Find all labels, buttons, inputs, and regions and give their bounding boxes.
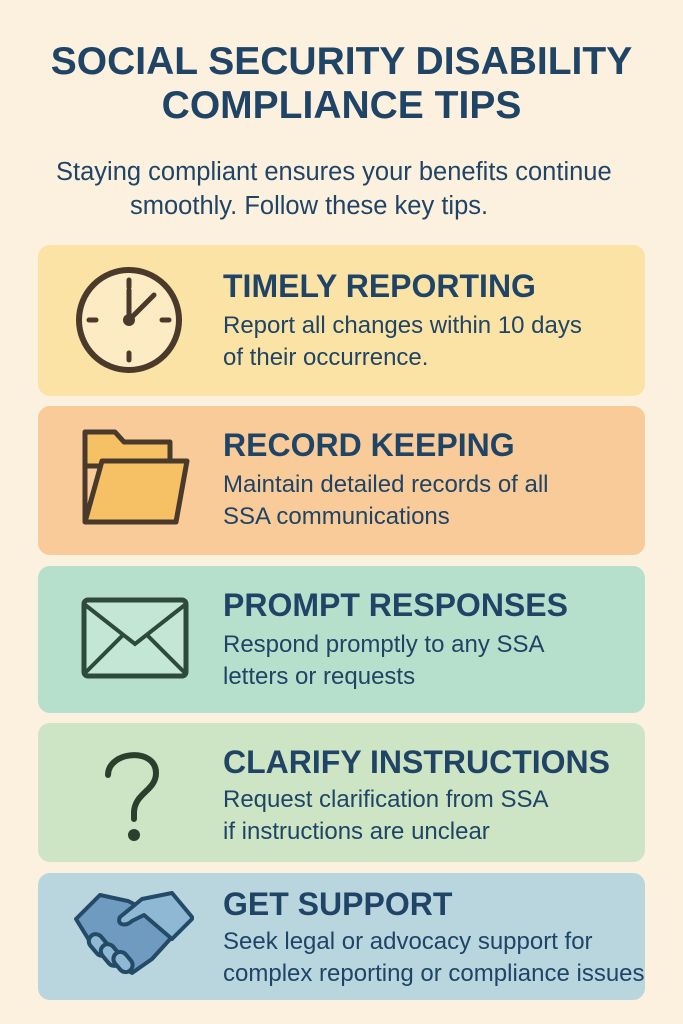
subtitle: Staying compliant ensures your benefits continue bbox=[56, 158, 612, 186]
panel: prompt responses bbox=[38, 566, 645, 713]
icon: folder bbox=[82, 430, 190, 524]
heading: RECORD KEEPING bbox=[223, 427, 515, 463]
text: if instructions are unclear bbox=[223, 818, 490, 845]
subtitle bbox=[56, 158, 612, 220]
text: Request clarification from SSA bbox=[223, 786, 548, 813]
text bbox=[223, 312, 582, 371]
text: Respond promptly to any SSA bbox=[223, 631, 545, 658]
text bbox=[223, 786, 548, 845]
text: Maintain detailed records of all bbox=[223, 471, 549, 498]
heading: PROMPT RESPONSES bbox=[223, 587, 568, 623]
text: Seek legal or advocacy support for bbox=[223, 928, 593, 955]
text: SSA communications bbox=[223, 503, 450, 530]
text bbox=[223, 631, 545, 690]
icon: envelope bbox=[82, 598, 188, 678]
panel: record keeping bbox=[38, 406, 645, 555]
text: letters or requests bbox=[223, 663, 415, 690]
panel: get support bbox=[38, 873, 645, 1000]
panel: clarify instructions bbox=[38, 723, 645, 862]
title bbox=[51, 40, 632, 127]
title: COMPLIANCE TIPS bbox=[162, 84, 521, 127]
heading: GET SUPPORT bbox=[223, 886, 452, 922]
heading: CLARIFY INSTRUCTIONS bbox=[223, 744, 610, 780]
text bbox=[223, 471, 549, 530]
subtitle: smoothly. Follow these key tips. bbox=[130, 192, 488, 220]
text: Report all changes within 10 days bbox=[223, 312, 582, 339]
title: SOCIAL SECURITY DISABILITY bbox=[51, 40, 632, 83]
icon: clock bbox=[76, 267, 182, 373]
icon: question mark bbox=[105, 752, 159, 841]
text: complex reporting or compliance issues bbox=[223, 960, 645, 987]
text bbox=[223, 928, 645, 987]
heading: TIMELY REPORTING bbox=[223, 268, 536, 304]
panel: timely reporting bbox=[38, 245, 645, 396]
text: of their occurrence. bbox=[223, 344, 428, 371]
icon: handshake bbox=[74, 891, 194, 975]
